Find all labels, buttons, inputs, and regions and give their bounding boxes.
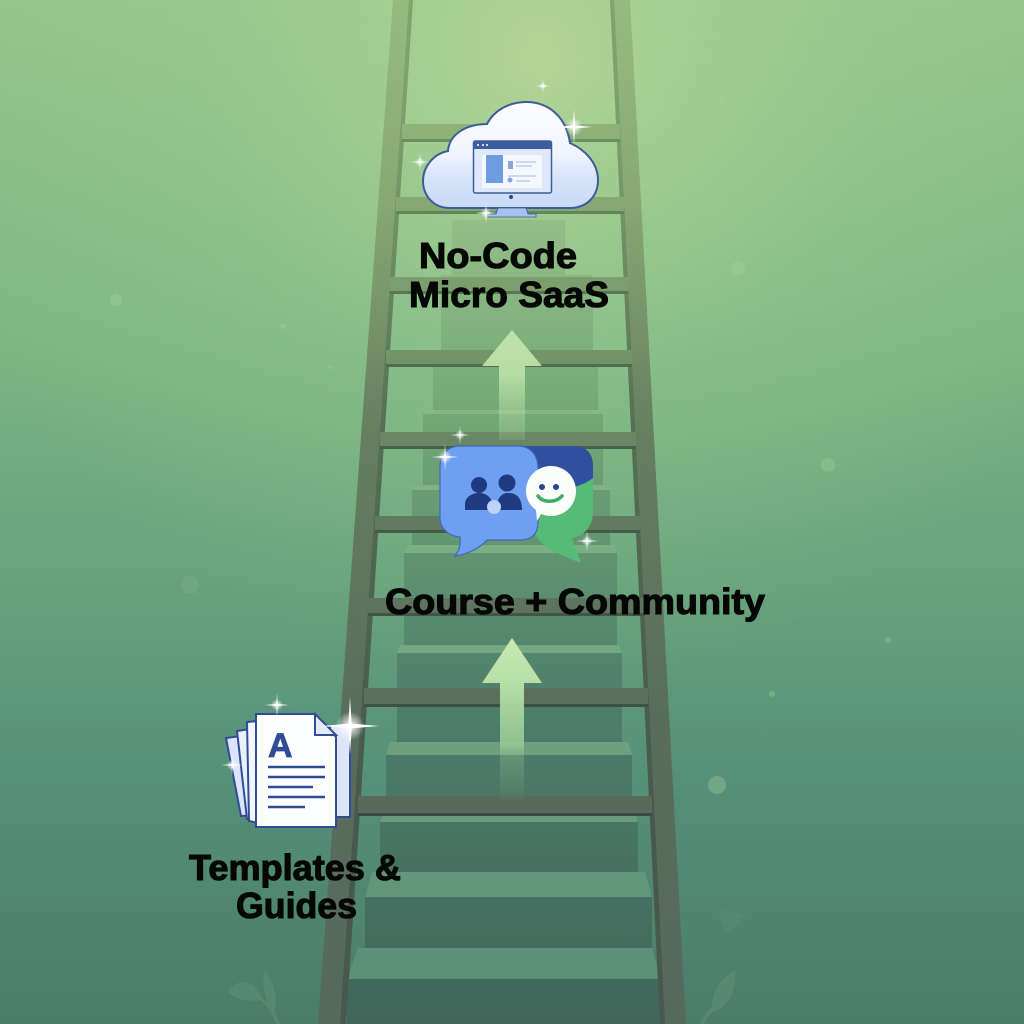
rungs	[358, 124, 652, 816]
arrow: upper growth arrow	[482, 330, 542, 440]
left rail	[318, 0, 413, 1024]
foliage	[228, 908, 747, 1024]
right rail	[610, 0, 686, 1024]
ladder	[318, 0, 686, 1024]
green bubble	[528, 478, 593, 563]
label: Templates & Guides	[189, 847, 401, 926]
label: Templates & Guides: Guides	[236, 885, 357, 926]
staircase	[347, 220, 660, 1024]
monitor stand	[488, 208, 536, 217]
label: No-Code Micro SaaS: Micro SaaS	[409, 274, 609, 315]
arrow: lower growth arrow	[482, 638, 542, 800]
smiley speech bubble	[526, 466, 576, 521]
icon: document stack	[226, 714, 350, 827]
group figures	[465, 474, 522, 510]
step treads	[347, 410, 660, 979]
monitor screen	[474, 141, 552, 193]
sparkles	[221, 79, 598, 776]
icon: cloud with monitor	[423, 102, 598, 217]
floating particles	[110, 97, 891, 794]
step fronts, far to near	[347, 220, 660, 1024]
icon: chat bubbles	[440, 446, 593, 563]
label: No-Code Micro SaaS: No-Code	[419, 235, 577, 276]
letter and text lines: A	[268, 727, 293, 765]
dark blue rear bubble	[520, 446, 593, 500]
front page	[256, 714, 336, 827]
blue bubble	[440, 446, 538, 556]
label: No-Code Micro SaaS	[409, 235, 609, 315]
label: Templates & Guides: Templates &	[189, 847, 401, 888]
rung shadow edges	[358, 139, 652, 816]
label: Course + Community: Course + Community	[385, 581, 765, 622]
